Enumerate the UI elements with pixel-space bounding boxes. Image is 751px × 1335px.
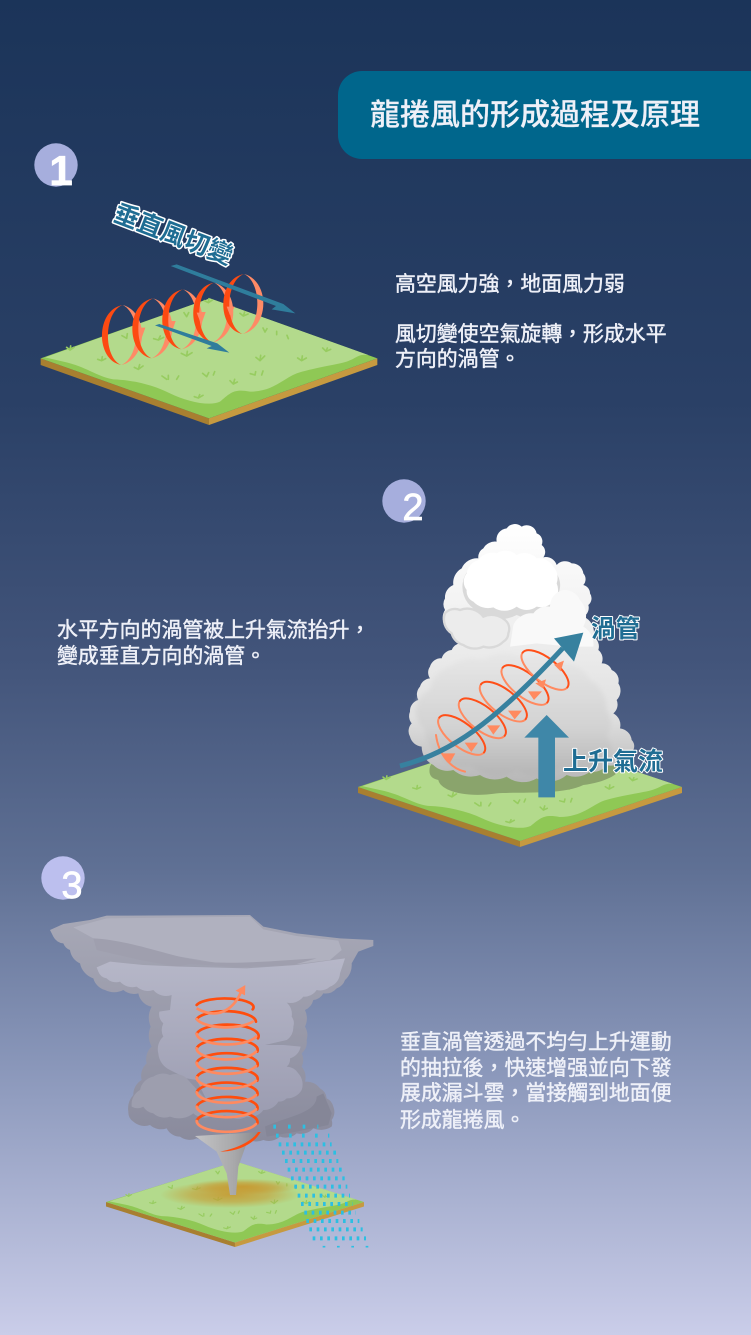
text block: step 1 description: 方向的渦管。: [395, 348, 520, 371]
text block: step 3 description: 的抽拉後，快速增强並向下發: [400, 1057, 672, 1080]
label: vortex tube: 渦管: [591, 615, 640, 643]
step 3 number badge: 3: [61, 865, 83, 907]
step 2 illustration: cumulonimbus with rising vortex: [400, 524, 634, 797]
tornado spiral tail: [220, 1132, 261, 1152]
horizontal vortex rings: [102, 274, 263, 365]
step 2 number badge: [382, 479, 426, 529]
vortex spiral arrowheads: [442, 661, 564, 764]
funnel cloud: [195, 1132, 261, 1195]
step 1 illustration: horizontal vortex over ground: [41, 264, 377, 425]
step 3 number badge: [41, 856, 85, 907]
text block: step 1 description: 風切變使空氣旋轉，形成水平: [395, 323, 667, 346]
storm cloud: [50, 915, 373, 1141]
tornado spiral upward arrow: [197, 985, 245, 1013]
text block: step 2 description: [57, 619, 370, 668]
vortex axis arrow: [400, 633, 583, 766]
updraft arrow: [524, 715, 569, 797]
text block: step 2 description: 水平方向的渦管被上升氣流抬升，: [57, 619, 370, 642]
cumulonimbus cloud: [409, 524, 634, 782]
ground island: [41, 298, 377, 425]
rain: [273, 1127, 369, 1247]
text block: step 3 description: 垂直渦管透過不均勻上升運動: [400, 1031, 672, 1054]
cloud top puff shade: [462, 562, 560, 619]
step 2 ground island: [358, 733, 682, 847]
step 3 illustration: tornado: [50, 915, 373, 1247]
cloud lower shaded mass: [416, 654, 611, 776]
title banner: 龍捲風的形成過程及原理: [370, 99, 700, 132]
scorched ground dust: [160, 1179, 300, 1208]
text block: step 3 description: 展成漏斗雲，當接觸到地面便: [400, 1082, 672, 1105]
text block: step 2 description: 變成垂直方向的渦管。: [57, 645, 266, 668]
cloud shadow: [429, 760, 620, 795]
step 1 number badge: 1: [49, 147, 73, 194]
cloud middle left puff: [444, 609, 509, 649]
text block: step 3 description: 形成龍捲風。: [400, 1109, 525, 1132]
step 1 number badge: [34, 143, 78, 194]
lower wind arrow: [155, 324, 229, 353]
text block: step 3 description: [400, 1031, 672, 1132]
label: updraft: 上升氣流: [563, 748, 663, 776]
title banner: [338, 71, 751, 159]
upper wind arrow: [171, 264, 295, 313]
step 2 number badge: 2: [402, 487, 424, 529]
cloud white top puff: [464, 551, 558, 611]
text block: step 1 description: [395, 273, 667, 371]
label: vertical wind shear: 垂直風切變: [110, 199, 237, 270]
tornado spiral coil: [197, 998, 259, 1132]
text block: step 1 description: 高空風力強，地面風力弱: [395, 273, 625, 296]
cloud right white puff: [510, 590, 593, 647]
step 3 ground island: [106, 1162, 364, 1247]
vortex spiral coil: [432, 643, 575, 772]
